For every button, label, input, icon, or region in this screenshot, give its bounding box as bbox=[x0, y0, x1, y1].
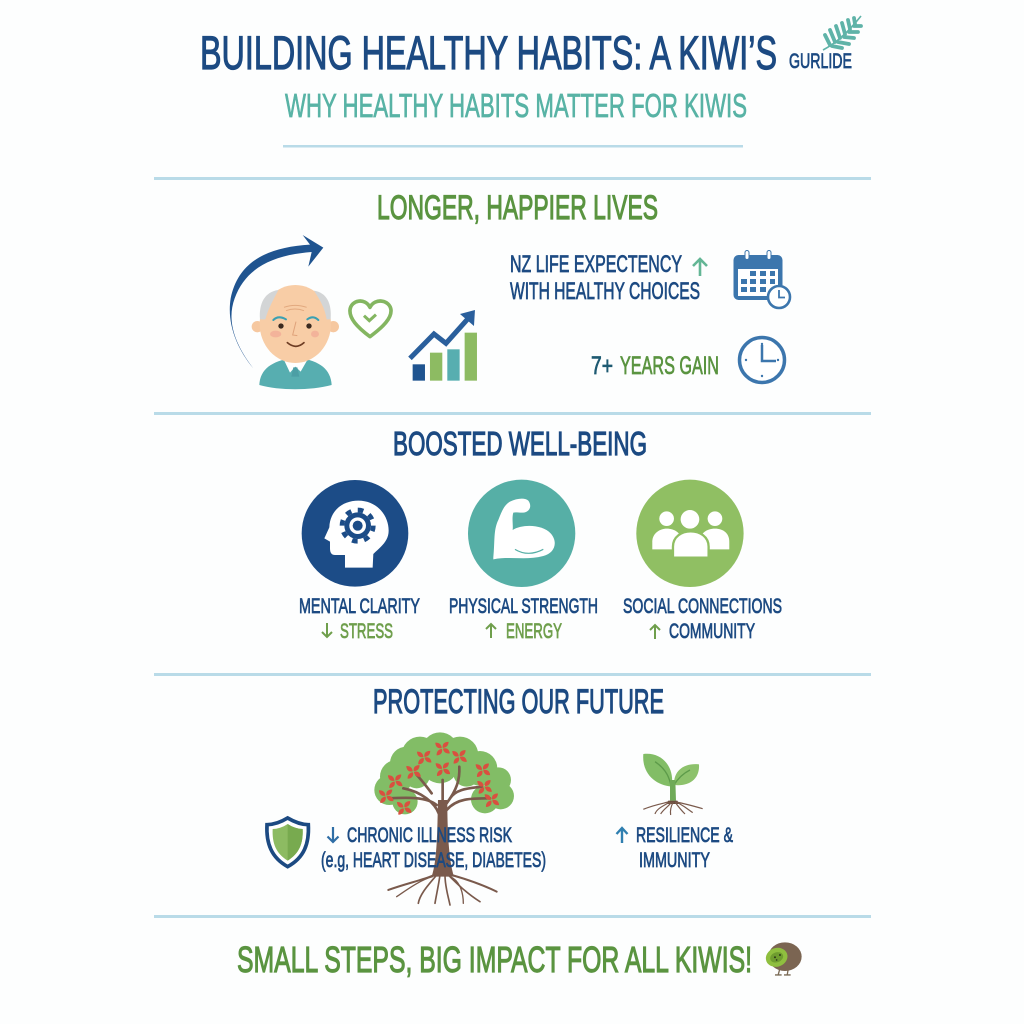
icon: tree with red blossoms and roots bbox=[374, 732, 514, 905]
text: seven plus years gain bbox=[591, 352, 719, 380]
text: resilience and immunity: RESILIENCE & bbox=[636, 824, 733, 847]
icon: flexed bicep bbox=[468, 480, 575, 587]
icon: kiwi bird bbox=[763, 942, 802, 975]
bar chart with rising arrow bbox=[410, 310, 477, 381]
heading: protecting our future: PROTECTING OUR FUTURE bbox=[373, 683, 664, 721]
icon: shield bbox=[267, 818, 308, 867]
text: resilience and immunity: IMMUNITY bbox=[639, 849, 710, 872]
label: mental clarity: MENTAL CLARITY bbox=[299, 595, 420, 618]
footer message: SMALL STEPS, BIG IMPACT FOR ALL KIWIS! bbox=[237, 939, 752, 980]
guide label with fern: GURLIDE bbox=[789, 50, 852, 73]
heading: boosted well-being: BOOSTED WELL-BEING bbox=[393, 425, 647, 462]
text: chronic illness risk: CHRONIC ILLNESS RISK bbox=[347, 824, 512, 847]
panel: protecting our future bbox=[267, 683, 733, 905]
label: physical strength bbox=[449, 595, 598, 643]
icon: clock bbox=[740, 338, 784, 382]
icon: head with gear bbox=[302, 480, 408, 587]
label: social connections: COMMUNITY bbox=[669, 620, 755, 643]
icon: heart with check bbox=[350, 301, 391, 337]
text: life expectancy: NZ LIFE EXPECTENCY bbox=[510, 251, 682, 278]
text: life expectancy bbox=[510, 251, 707, 305]
guide label with fern bbox=[789, 16, 861, 73]
icon: calendar with clock bbox=[734, 250, 790, 308]
text: seven plus years gain: YEARS GAIN bbox=[620, 352, 719, 380]
text: seven plus years gain: 7+ bbox=[591, 352, 613, 380]
heading: longer happier lives: LONGER, HAPPIER LIVES bbox=[377, 189, 658, 227]
label: mental clarity bbox=[299, 595, 420, 643]
label: physical strength: ENERGY bbox=[506, 620, 562, 643]
label: mental clarity: STRESS bbox=[340, 620, 393, 643]
title: BUILDING HEALTHY HABITS: A KIWI’S bbox=[200, 26, 777, 79]
panel: boosted well-being bbox=[299, 425, 782, 643]
text: resilience and immunity bbox=[616, 824, 733, 872]
text: chronic illness risk: (e.g, HEART DISEASE, DIABETES) bbox=[321, 849, 546, 872]
text: life expectancy: WITH HEALTHY CHOICES bbox=[510, 278, 700, 305]
icon: smiling elderly man bbox=[252, 285, 339, 389]
subtitle: WHY HEALTHY HABITS MATTER FOR KIWIS bbox=[285, 87, 747, 124]
label: social connections: SOCIAL CONNECTIONS bbox=[623, 595, 782, 618]
arrow: curved life arrow bbox=[230, 235, 323, 368]
text: chronic illness risk bbox=[321, 824, 546, 872]
label: social connections bbox=[623, 595, 782, 643]
label: physical strength: PHYSICAL STRENGTH bbox=[449, 595, 598, 618]
icon: sprout with roots bbox=[643, 754, 703, 815]
panel: longer, happier lives bbox=[230, 189, 790, 389]
icon: group of people bbox=[636, 480, 744, 587]
